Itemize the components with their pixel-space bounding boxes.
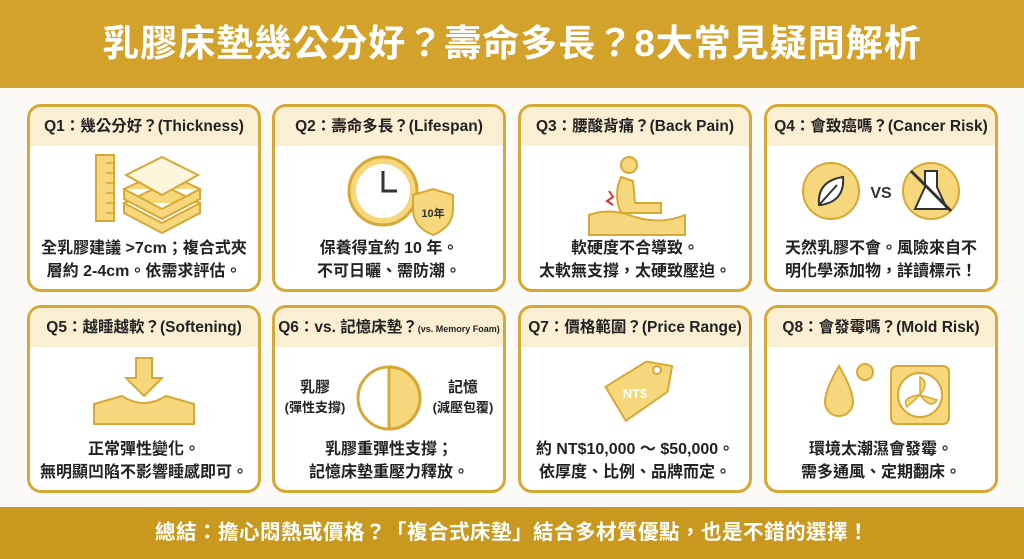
footer summary: [0, 507, 1024, 559]
icon: leaf vs flask: [802, 162, 960, 220]
icon: half circle comparison: 記憶: [448, 378, 478, 396]
text Q8: [801, 440, 961, 481]
text Q4: 天然乳膠不會。風險來自不: [785, 240, 977, 257]
panel: Q1: [27, 104, 261, 292]
heading Q5: [30, 308, 258, 347]
text Q2: 保養得宜約 10 年。: [320, 240, 458, 257]
panel: Q7: [518, 305, 752, 493]
icon: ruler and layers: [95, 154, 202, 234]
heading Q4: [767, 107, 995, 146]
icon: person on mattress: [588, 156, 686, 236]
text Q7: 約 NT$10,000 ～ $50,000。: [536, 441, 734, 458]
heading Q5: Q5：越睡越軟？(Softening): [46, 319, 242, 336]
icon: half circle comparison: [285, 366, 493, 430]
heading Q7: [521, 308, 749, 347]
panel: Q4: [764, 104, 998, 292]
heading Q7: Q7：價格範圍？(Price Range): [528, 319, 742, 336]
heading Q1: [30, 107, 258, 146]
panel: Q2: [272, 104, 506, 292]
icon: clock with shield: [348, 156, 454, 236]
heading Q3: [521, 107, 749, 146]
heading Q2: [275, 107, 503, 146]
heading Q6: Q6：vs. 記憶床墊？(vs. Memory Foam): [278, 319, 500, 336]
text Q1: 層約 2-4cm。依需求評估。: [47, 263, 241, 280]
text Q5: 無明顯凹陷不影響睡感即可。: [40, 464, 248, 481]
icon: half circle comparison: (彈性支撐): [285, 400, 345, 415]
title: 乳膠床墊幾公分好？壽命多長？8大常見疑問解析: [102, 23, 922, 64]
heading Q1: Q1：幾公分好？(Thickness): [44, 118, 244, 135]
icon: half circle comparison: 乳膠: [300, 378, 330, 396]
text Q1: 全乳膠建議 >7cm；複合式夾: [41, 240, 247, 257]
icon: drop, mold, fan: [824, 363, 950, 425]
text Q4: [785, 239, 977, 280]
text Q7: 依厚度、比例、品牌而定。: [539, 464, 731, 481]
text Q2: [317, 239, 461, 280]
icon: clock with shield: 10年: [421, 206, 445, 220]
heading Q2: Q2：壽命多長？(Lifespan): [295, 118, 483, 135]
footer summary: 總結：擔心悶熱或價格？「複合式床墊」結合多材質優點，也是不錯的選擇！: [155, 521, 869, 544]
text Q1: [41, 239, 247, 280]
heading Q8: [767, 308, 995, 347]
panel: Q6: [272, 305, 506, 493]
text Q3: 太軟無支撐，太硬致壓迫。: [539, 263, 731, 280]
title: [0, 0, 1024, 88]
icon: price tag: NT$: [623, 386, 648, 401]
text Q4: 明化學添加物，詳讀標示！: [785, 263, 977, 280]
icon: leaf vs flask: VS: [870, 185, 892, 202]
text Q8: 需多通風、定期翻床。: [801, 464, 961, 481]
text Q7: [536, 440, 734, 481]
panel: Q5: [27, 305, 261, 493]
panel: Q3: [518, 104, 752, 292]
icon: mattress with arrow: [93, 357, 195, 425]
heading Q8: Q8：會發霉嗎？(Mold Risk): [782, 319, 980, 336]
panel: Q8: [764, 305, 998, 493]
text Q6: 記憶床墊重壓力釋放。: [309, 464, 469, 481]
heading Q3: Q3：腰酸背痛？(Back Pain): [536, 118, 734, 135]
icon: half circle comparison: (減壓包覆): [433, 400, 493, 415]
heading Q6: [275, 308, 503, 347]
text Q3: 軟硬度不合導致。: [571, 240, 699, 257]
icon: price tag: [604, 360, 674, 422]
text Q6: [309, 440, 469, 481]
text Q8: 環境太潮濕會發霉。: [809, 441, 953, 458]
text Q5: 正常彈性變化。: [88, 441, 200, 458]
heading Q4: Q4：會致癌嗎？(Cancer Risk): [774, 118, 988, 135]
text Q3: [539, 239, 731, 280]
text Q5: [40, 440, 248, 481]
text Q6: 乳膠重彈性支撐；: [325, 441, 453, 458]
text Q2: 不可日曬、需防潮。: [317, 263, 461, 280]
